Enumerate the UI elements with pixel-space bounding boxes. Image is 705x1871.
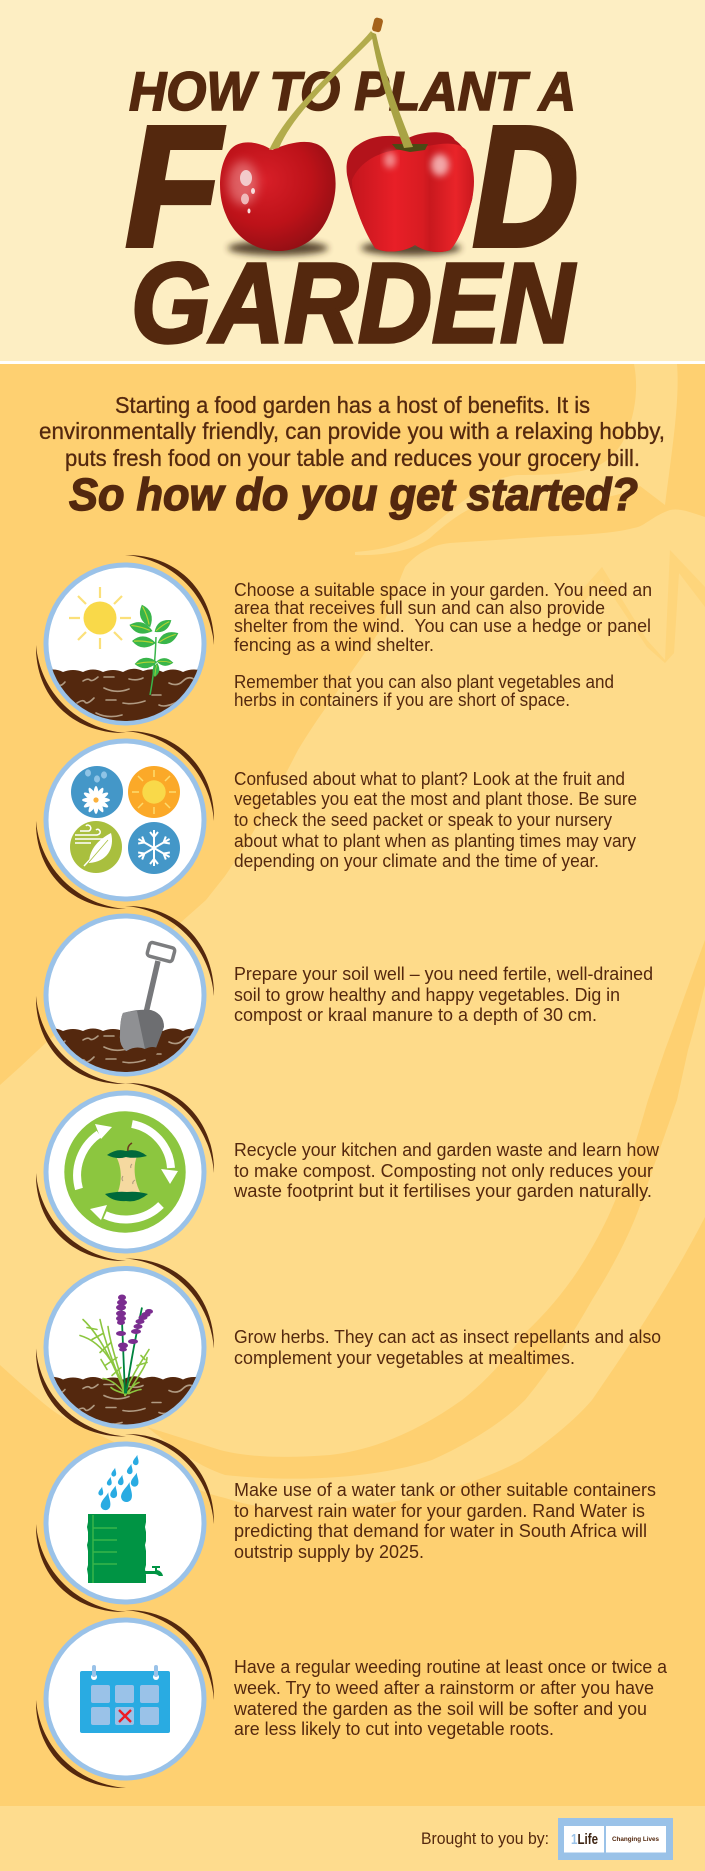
step 5 text: complement your vegetables at mealtimes.: [234, 1348, 575, 1368]
heading letter F: F: [126, 92, 224, 282]
step 1 text: herbs in containers if you are short of space.: [234, 690, 570, 710]
step 3 text: Prepare your soil well – you need fertile, well-drained: [234, 964, 653, 984]
logo: 1Life Changing Lives: Changing Lives: [612, 1836, 659, 1843]
step 3 text: [234, 964, 653, 1025]
step 2 text: Confused about what to plant? Look at the fruit and: [234, 769, 625, 789]
step 4 text: waste footprint but it fertilises your garden naturally.: [233, 1181, 652, 1201]
icon: cherry stems: [269, 17, 413, 150]
step 5 text: Grow herbs. They can act as insect repellants and also: [234, 1327, 661, 1347]
heading letter D: D: [473, 92, 578, 282]
step 5 text: [234, 1327, 661, 1368]
step 1 text: area that receives full sun and can also provide: [234, 598, 605, 618]
step 2 icon: four climate badges: [36, 731, 214, 909]
step 6 text: predicting that demand for water in South Africa will: [234, 1521, 647, 1541]
step 1 text: [234, 580, 652, 710]
footer credit text: Brought to you by:: [421, 1829, 549, 1848]
title: how to plant a food garden: [126, 60, 578, 366]
icon: cherry: [220, 142, 336, 251]
step 7 text: week. Try to weed after a rainstorm or after you have: [233, 1678, 654, 1698]
divider: [0, 361, 705, 364]
intro text: puts fresh food on your table and reduces your grocery bill.: [65, 445, 640, 471]
step 2 text: [234, 769, 637, 871]
step 1 text: shelter from the wind. You can use a hedge or panel: [234, 616, 651, 636]
step 5 icon: herbs: [36, 1258, 214, 1436]
step 3 text: compost or kraal manure to a depth of 30 cm.: [234, 1005, 597, 1025]
step 1 text: Choose a suitable space in your garden. You need an: [234, 580, 652, 600]
step 2 text: to check the seed packet or speak to your nursery: [234, 810, 612, 830]
step 7 text: are less likely to cut into vegetable roots.: [234, 1719, 554, 1739]
title banner background: [0, 0, 705, 361]
icon: red pepper: [347, 132, 474, 252]
step 4 text: to make compost. Composting not only reduces your: [234, 1161, 653, 1181]
step 4 icon: compost recycling: [36, 1083, 214, 1261]
main background: [0, 364, 705, 1806]
step 6 icon: rainwater tank: [36, 1434, 214, 1612]
step 6 text: [234, 1480, 656, 1562]
footer band: [0, 1806, 705, 1871]
logo: 1Life Changing Lives: [558, 1818, 673, 1860]
step 6 text: Make use of a water tank or other suitable containers: [234, 1480, 656, 1500]
step 2 text: vegetables you eat the most and plant those. Be sure: [234, 789, 637, 809]
heading line: GARDEN: GARDEN: [131, 240, 576, 366]
logo: 1Life Changing Lives: 1Life: [571, 1832, 598, 1848]
step 1 text: Remember that you can also plant vegetables and: [234, 672, 614, 692]
step 2 text: depending on your climate and the time of year.: [234, 851, 599, 871]
step 7 text: watered the garden as the soil will be softer and you: [233, 1699, 647, 1719]
step 2 text: about what to plant when as planting times may vary: [234, 831, 636, 851]
intro text: [39, 392, 665, 471]
step 4 text: [233, 1140, 660, 1201]
step 6 text: outstrip supply by 2025.: [234, 1542, 424, 1562]
subheading: So how do you get started?: [69, 469, 638, 520]
step 1 icon: sun and seedling: [36, 555, 214, 733]
intro text: Starting a food garden has a host of benefits. It is: [115, 392, 590, 418]
step 3 icon: spade in soil: [36, 906, 214, 1084]
intro text: environmentally friendly, can provide you with a relaxing hobby,: [39, 418, 665, 444]
heading line: HOW TO PLANT A: HOW TO PLANT A: [129, 60, 576, 122]
step 6 text: to harvest rain water for your garden. Rand Water is: [234, 1501, 645, 1521]
step 7 text: [233, 1657, 668, 1739]
step 1 text: fencing as a wind shelter.: [234, 635, 434, 655]
step 3 text: soil to grow healthy and happy vegetables. Dig in: [234, 985, 620, 1005]
step 4 text: Recycle your kitchen and garden waste and learn how: [234, 1140, 660, 1160]
icon: shadows under cherry and pepper: [228, 240, 461, 256]
step 7 text: Have a regular weeding routine at least once or twice a: [234, 1657, 668, 1677]
step 7 icon: calendar: [36, 1610, 214, 1788]
